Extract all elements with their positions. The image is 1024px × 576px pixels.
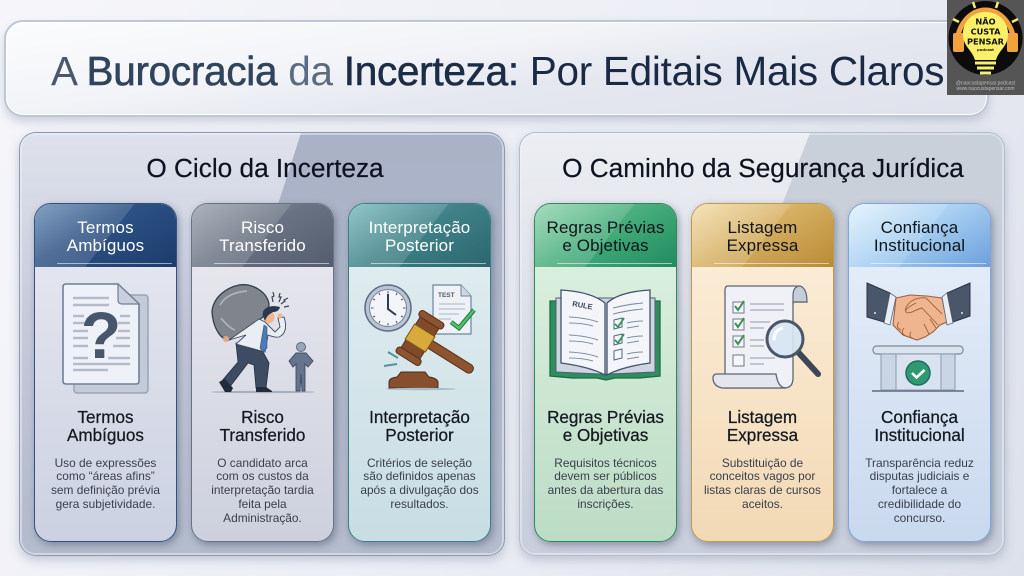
panel: O Caminho da Segurança Jurídica: [519, 132, 1005, 556]
card title: [727, 408, 798, 445]
card header: Termos: [77, 218, 134, 236]
card header: Expressa: [727, 236, 798, 255]
card description: feita pela: [238, 497, 287, 511]
card header: [192, 204, 333, 267]
card title: Regras Prévias: [547, 408, 664, 426]
logo: Não Custa Pensar podcast: podcast: [977, 47, 994, 52]
card header: e Objetivas: [562, 236, 649, 255]
card title: [874, 408, 965, 445]
card title: Risco: [241, 408, 284, 426]
card title: [369, 408, 470, 445]
card description: [211, 456, 314, 525]
logo: Não Custa Pensar podcast: www.naocustapensar.com: [956, 86, 1015, 92]
card: Listagem Expressa: [691, 203, 834, 542]
icon: document with question mark: ?: [81, 298, 121, 372]
logo: Não Custa Pensar podcast: NÃO: [975, 16, 996, 26]
icon: open rule book: [549, 289, 661, 381]
card description: devem ser públicos: [554, 469, 657, 483]
card header: Regras Prévias: [547, 218, 664, 236]
card description: são definidos apenas: [363, 469, 476, 483]
logo: Não Custa Pensar podcast: PENSAR: [967, 36, 1005, 46]
logo: Não Custa Pensar podcast: CUSTA: [971, 26, 1001, 36]
card description: concurso.: [894, 511, 945, 525]
card description: antes da abertura das: [548, 483, 663, 497]
card description: inscrições.: [577, 497, 634, 511]
icon: open rule book: RULE: [572, 299, 593, 312]
card description: [548, 456, 663, 511]
card header: [35, 204, 176, 267]
card description: interpretação tardia: [211, 483, 314, 497]
title text: A Burocracia da Incerteza: Por Editais Mais Claros: [51, 48, 944, 94]
card description: Administração.: [223, 511, 302, 525]
card: Confiança Institucional: [848, 203, 991, 542]
card description: [704, 456, 821, 511]
card header: [692, 204, 833, 267]
icon: clock, test and gavel: TEST: [438, 292, 455, 299]
logo: Não Custa Pensar podcast: [947, 0, 1024, 95]
card header: Confiança: [881, 218, 958, 236]
card description: conceitos vagos por: [710, 469, 815, 483]
card title: Expressa: [727, 426, 798, 445]
card title: [66, 408, 144, 445]
card description: [865, 456, 974, 525]
card title: Confiança: [881, 408, 958, 426]
card description: resultados.: [390, 497, 449, 511]
card description: como “áreas afins”: [56, 469, 155, 483]
card description: Requisitos técnicos: [554, 456, 657, 470]
icon: scroll checklist with magnifier: [712, 285, 821, 389]
card description: Substituição de: [722, 456, 803, 470]
icon: man carrying rock: [211, 284, 315, 394]
card description: gera subjetividade.: [56, 497, 155, 511]
card header: Interpretação: [369, 218, 470, 236]
card title: [547, 408, 664, 445]
card description: Critérios de seleção: [367, 456, 472, 470]
title banner: [4, 20, 989, 117]
card title: Institucional: [874, 426, 965, 445]
panel heading: O Caminho da Segurança Jurídica: [562, 152, 964, 182]
card: Risco Transferido: [191, 203, 334, 542]
card: Interpretação Posterior: [348, 203, 491, 542]
card header: Risco: [241, 218, 284, 236]
card description: com os custos da: [216, 469, 309, 483]
card title: [220, 408, 305, 445]
card header: [535, 204, 676, 267]
card description: [51, 456, 160, 511]
card title: Interpretação: [369, 408, 470, 426]
card header: Transferido: [219, 236, 306, 255]
card: Termos Ambíguos: [34, 203, 177, 542]
card header: [849, 204, 990, 267]
card title: Listagem: [728, 408, 797, 426]
card header: Posterior: [385, 236, 454, 255]
icon: document with question mark: [62, 282, 149, 394]
card description: listas claras de cursos: [704, 483, 821, 497]
card header: [349, 204, 490, 267]
card description: O candidato arca: [217, 456, 308, 470]
card description: Uso de expressões: [55, 456, 156, 470]
card description: Transparência reduz: [865, 456, 974, 470]
card header: Listagem: [728, 218, 797, 236]
card description: credibilidade do: [878, 497, 961, 511]
card description: após a divulgação dos: [360, 483, 479, 497]
card description: fortalece a: [892, 483, 947, 497]
panel: O Ciclo da Incerteza: [19, 132, 505, 556]
card description: aceitos.: [742, 497, 783, 511]
card description: sem definição prévia: [51, 483, 160, 497]
icon: clock, test and gavel: [364, 284, 476, 390]
icon: handshake and institution: [866, 282, 970, 392]
panel heading: O Ciclo da Incerteza: [146, 152, 384, 182]
card title: Ambíguos: [67, 426, 144, 445]
card title: Transferido: [220, 426, 305, 445]
card title: e Objetivas: [563, 426, 648, 445]
logo: Não Custa Pensar podcast: @naocustapensar.podcast: [956, 80, 1016, 86]
card header: Institucional: [874, 236, 965, 255]
card description: [360, 456, 479, 511]
card title: Termos: [77, 408, 134, 426]
card title: Posterior: [385, 426, 454, 445]
card description: disputas judiciais e: [870, 469, 969, 483]
card: Regras Prévias e Objetivas: [534, 203, 677, 542]
card header: Ambíguos: [67, 236, 144, 255]
